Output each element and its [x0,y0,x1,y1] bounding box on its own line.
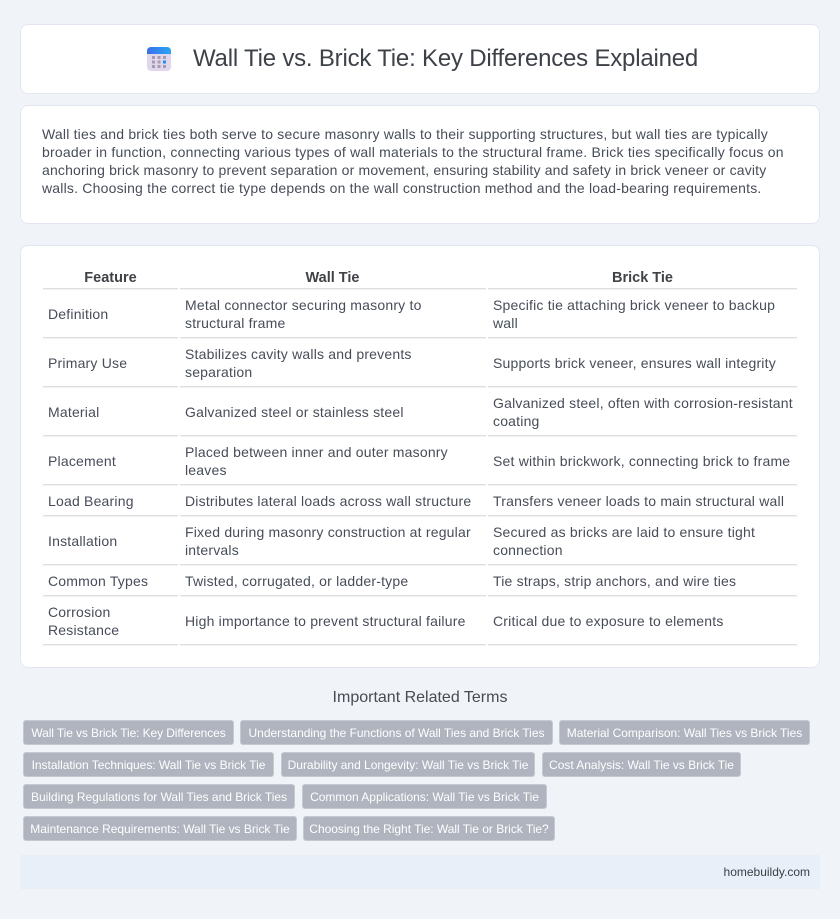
row: Definition: Specific tie attaching brick veneer to backup [493,297,775,313]
row: Primary Use [48,346,776,380]
related terms tags: Wall Tie vs Brick Tie: Key Differences [31,726,226,740]
related terms tags: Installation Techniques: Wall Tie vs Brick Tie [32,758,265,772]
related terms tags: Cost Analysis: Wall Tie vs Brick Tie [549,758,734,772]
intro text: Wall ties and brick ties both serve to secure masonry walls to their supporting structures, but wall ties are typically [42,126,768,142]
row: Definition: Definition [48,306,108,322]
row: Common Types: Common Types [48,573,148,589]
row: Definition: wall [493,315,518,331]
row: Installation: Secured as bricks are laid to ensure tight [493,524,755,540]
row: Placement: Set within brickwork, connecting brick to frame [493,453,790,469]
related terms tags: Maintenance Requirements: Wall Tie vs Brick Tie [30,822,290,836]
row: Corrosion Resistance: Resistance [48,622,119,638]
row: Primary Use: Stabilizes cavity walls and prevents [185,346,412,362]
footer [20,855,820,889]
related terms tags: Material Comparison: Wall Ties vs Brick Ties [567,726,802,740]
row: Material: Galvanized steel or stainless steel [185,404,404,420]
row: Corrosion Resistance [48,604,724,638]
table header: Feature [84,270,137,286]
related terms tags: Choosing the Right Tie: Wall Tie or Brick Tie? [309,822,549,836]
row: Load Bearing: Transfers veneer loads to main structural wall [493,493,784,509]
intro text [42,126,784,196]
related terms tags: Understanding the Functions of Wall Ties and Brick Ties [249,726,544,740]
panel: introduction [20,105,820,224]
row: Definition [48,297,775,331]
title: Wall Tie vs. Brick Tie: Key Differences Explained [193,45,698,72]
footer source: homebuildy.com [724,865,810,879]
panel: comparison table [20,245,820,668]
panel: title header [20,24,820,94]
row: Placement: Placed between inner and outer masonry [185,444,448,460]
row: Common Types [48,573,736,589]
row: Placement: leaves [185,462,227,478]
row: Primary Use: Supports brick veneer, ensures wall integrity [493,355,776,371]
table header: Wall Tie [306,270,360,286]
row: Load Bearing: Load Bearing [48,493,134,509]
row: Placement: Placement [48,453,116,469]
intro text: walls. Choosing the correct tie type depends on the wall construction method and the load-bearing requirements. [42,180,762,196]
row: Installation: Installation [48,533,117,549]
row: Installation: intervals [185,542,239,558]
row: Load Bearing: Distributes lateral loads across wall structure [185,493,471,509]
related terms tags [23,720,810,841]
row: Corrosion Resistance: Critical due to exposure to elements [493,613,724,629]
row: Load Bearing [48,493,784,509]
table header: Brick Tie [612,270,673,286]
related terms tags: Common Applications: Wall Tie vs Brick Tie [310,790,539,804]
related terms tags: Building Regulations for Wall Ties and Brick Ties [31,790,287,804]
row: Material: coating [493,413,540,429]
row: Corrosion Resistance: Corrosion [48,604,110,620]
row: Installation [48,524,755,558]
row: Installation: connection [493,542,563,558]
row: Common Types: Tie straps, strip anchors, and wire ties [493,573,736,589]
row: Placement [48,444,790,478]
intro text: broader in function, connecting various types of wall materials to the structural frame. Brick ties specifically focus on [42,144,784,160]
icon: calendar [147,47,171,71]
heading: Important Related Terms: Important Related Terms [333,689,507,706]
row: Material [48,395,793,429]
table header [84,270,673,286]
intro text: anchoring brick masonry to prevent separation or movement, ensuring stability and safety in brick veneer or cavity [42,162,766,178]
row: Installation: Fixed during masonry construction at regular [185,524,471,540]
row: Corrosion Resistance: High importance to prevent structural failure [185,613,466,629]
row: Primary Use: separation [185,364,252,380]
row: Definition: Metal connector securing masonry to [185,297,422,313]
row: Material: Galvanized steel, often with corrosion-resistant [493,395,793,411]
related terms tags: Durability and Longevity: Wall Tie vs Brick Tie [288,758,528,772]
row: Primary Use: Primary Use [48,355,127,371]
row: Material: Material [48,404,99,420]
row: Definition: structural frame [185,315,285,331]
row: Common Types: Twisted, corrugated, or ladder-type [185,573,408,589]
